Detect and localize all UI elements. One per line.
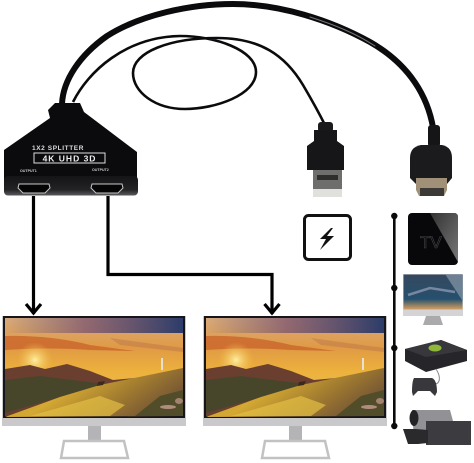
splitter label: model: 1X2 SPLITTER bbox=[32, 145, 84, 152]
splitter label: 4K UHD 3D: 4K UHD 3D bbox=[43, 154, 96, 164]
icon: TV box: TV bbox=[420, 233, 442, 252]
monitor 2 bbox=[203, 316, 387, 458]
label: output 1: OUTPUT1 bbox=[20, 169, 37, 173]
icon: desktop computer bbox=[403, 274, 463, 325]
icon: game console bbox=[405, 340, 467, 396]
splitter body bbox=[4, 103, 138, 196]
USB connector bbox=[307, 122, 344, 197]
monitor 1 bbox=[2, 316, 186, 458]
port: HDMI output 1 bbox=[18, 184, 50, 193]
icon: camcorder bbox=[403, 410, 471, 445]
label: output 2: OUTPUT2 bbox=[92, 168, 109, 172]
HDMI connector bbox=[410, 125, 452, 196]
cable: thin USB cable with loop bbox=[73, 36, 325, 125]
icon: TV box bbox=[408, 213, 458, 265]
timeline of source devices bbox=[391, 213, 397, 429]
cable: main HDMI cable bbox=[62, 4, 435, 146]
port: HDMI output 2 bbox=[91, 184, 123, 193]
arrow: output 1 to monitor 1 bbox=[26, 196, 41, 314]
icon: power bolt bbox=[304, 216, 350, 260]
arrow: output 2 to monitor 2 bbox=[108, 196, 280, 314]
